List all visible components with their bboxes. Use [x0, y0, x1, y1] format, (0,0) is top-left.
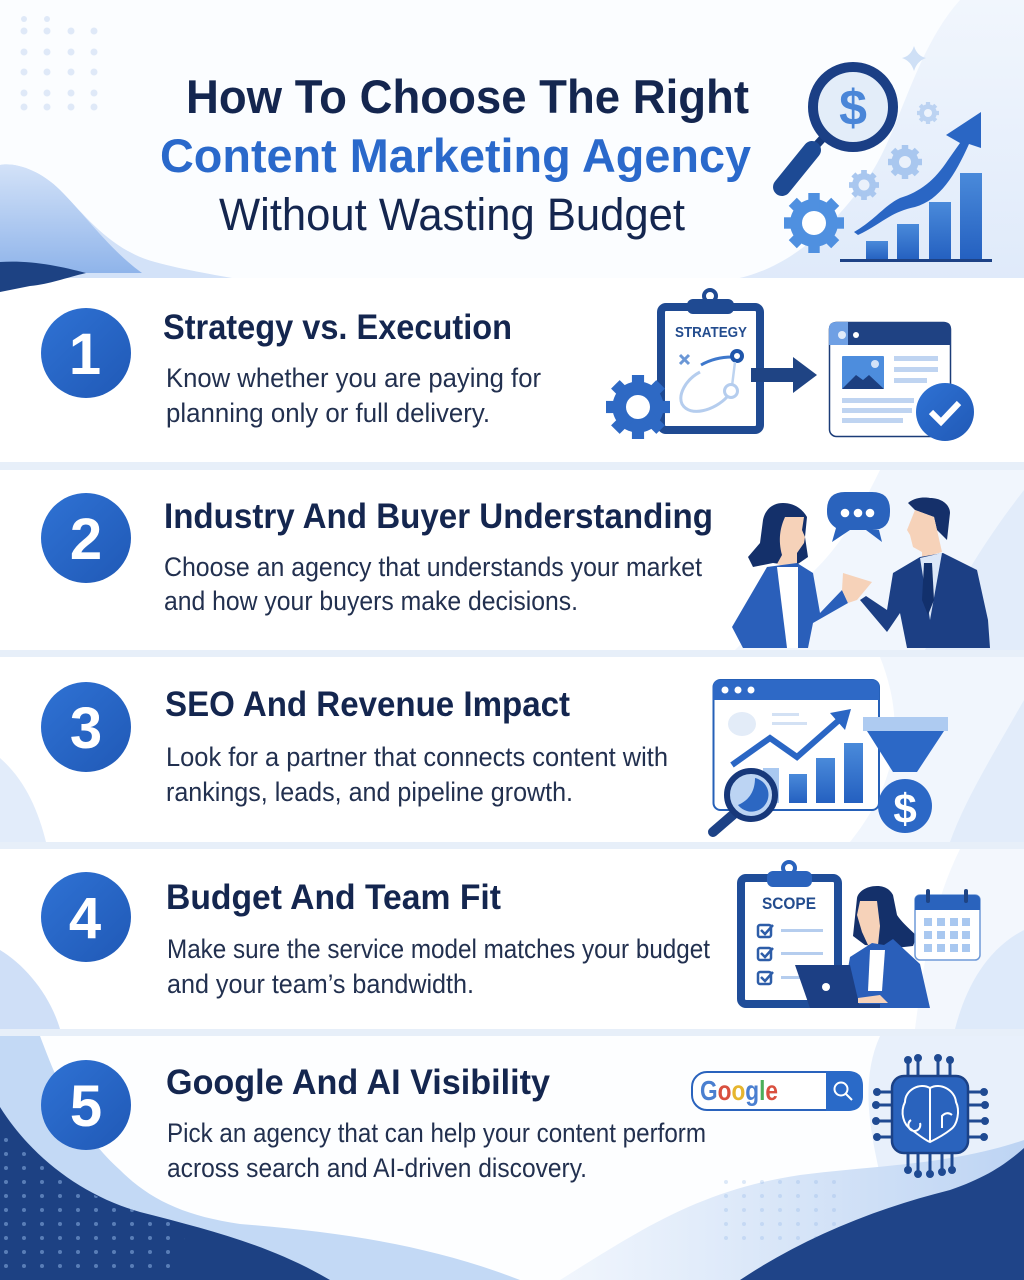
icon: Google search bar	[692, 1071, 863, 1111]
body 4	[167, 934, 710, 999]
body 2: and how your buyers make decisions.	[164, 586, 578, 616]
title	[160, 70, 751, 240]
panel: step 5	[41, 1056, 988, 1183]
number badge 3: 3	[70, 696, 102, 761]
number badge 3	[41, 682, 131, 772]
number badge 2: 2	[70, 507, 102, 572]
icon: analytics window, funnel and revenue: $	[893, 785, 917, 832]
body 2	[164, 552, 702, 616]
heading 4: Budget And Team Fit	[166, 878, 501, 917]
body 4: and your team’s bandwidth.	[167, 969, 474, 999]
body 3: rankings, leads, and pipeline growth.	[166, 777, 573, 807]
body 5: across search and AI-driven discovery.	[167, 1153, 587, 1183]
icon: analytics window, funnel and revenue	[713, 680, 948, 833]
body 1: planning only or full delivery.	[166, 398, 490, 428]
panel: step 2	[41, 492, 990, 648]
panel: step 4	[41, 862, 980, 1008]
title line 1: How To Choose The Right	[186, 70, 749, 123]
background wave: top right	[730, 0, 1024, 280]
icon: scope clipboard, woman with laptop and calendar: SCOPE	[762, 894, 816, 913]
title line 2: Content Marketing Agency	[160, 129, 751, 182]
heading 3: SEO And Revenue Impact	[165, 685, 570, 724]
body 3: Look for a partner that connects content with	[166, 742, 668, 772]
heading 2: Industry And Buyer Understanding	[164, 497, 713, 536]
icon: AI chip with brain	[874, 1056, 988, 1176]
number badge 1	[41, 308, 131, 398]
row bands	[0, 278, 1024, 1280]
body 1: Know whether you are paying for	[166, 363, 541, 393]
icon: header magnifier, gears and growth chart	[782, 46, 992, 262]
number badge 5	[41, 1060, 131, 1150]
icon: Google search bar: Google	[700, 1075, 778, 1106]
number badge 2	[41, 493, 131, 583]
number badge 5: 5	[70, 1074, 102, 1139]
icon: strategy clipboard to content page: STRATEGY	[675, 325, 747, 341]
background waves: right side	[735, 470, 1024, 1175]
background waves: left side	[0, 758, 60, 1029]
number badge 4: 4	[69, 886, 101, 951]
number badge 4	[41, 872, 131, 962]
body 5: Pick an agency that can help your content perform	[167, 1118, 706, 1148]
title line 3: Without Wasting Budget	[219, 189, 685, 240]
background wave: bottom left	[0, 1036, 520, 1280]
panel: step 3	[41, 680, 948, 833]
icon: scope clipboard, woman with laptop and calendar	[741, 862, 980, 1008]
body 5	[167, 1118, 706, 1183]
body 2: Choose an agency that understands your market	[164, 552, 702, 582]
panel: step 1	[41, 290, 974, 441]
icon: strategy clipboard to content page	[606, 290, 974, 441]
body 1	[166, 363, 541, 428]
decorative dots: top left	[20, 16, 98, 110]
background wave: bottom right	[560, 1140, 1024, 1280]
icon: two business people talking	[732, 492, 990, 648]
body 4: Make sure the service model matches your budget	[167, 934, 710, 964]
heading 5: Google And AI Visibility	[166, 1063, 551, 1102]
heading 1: Strategy vs. Execution	[163, 308, 512, 347]
background wave: top left	[0, 164, 232, 292]
icon: header magnifier, gears and growth chart: $	[839, 80, 867, 136]
body 3	[166, 742, 668, 807]
number badge 1: 1	[69, 322, 101, 387]
